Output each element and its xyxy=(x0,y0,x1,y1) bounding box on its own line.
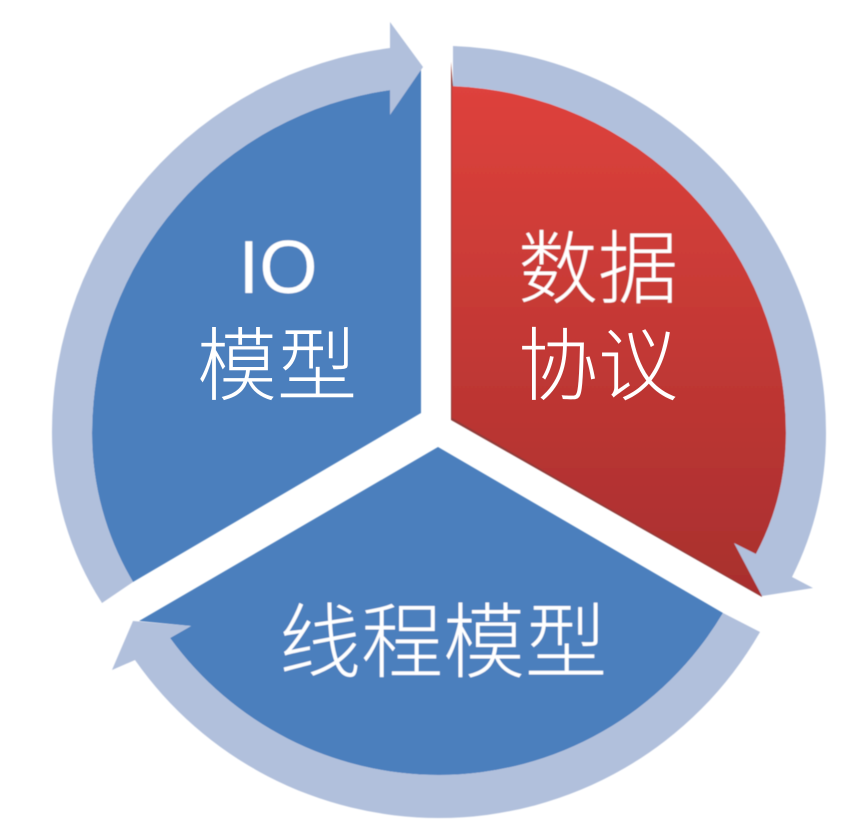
label: data protocol: 数据 xyxy=(518,225,678,314)
arrow: data protocol to thread model xyxy=(453,46,826,596)
arrow: IO model to data protocol xyxy=(52,22,423,603)
label: IO model: IO xyxy=(238,225,318,309)
segment: IO model xyxy=(52,22,423,603)
segment: thread model xyxy=(112,447,760,818)
arrow: thread model to IO model xyxy=(112,613,760,818)
label: IO model second line: 模型 xyxy=(197,322,357,411)
label: thread model: 线程模型 xyxy=(279,598,607,689)
label: data protocol second line: 协议 xyxy=(518,322,678,411)
segment: data protocol xyxy=(451,46,826,597)
